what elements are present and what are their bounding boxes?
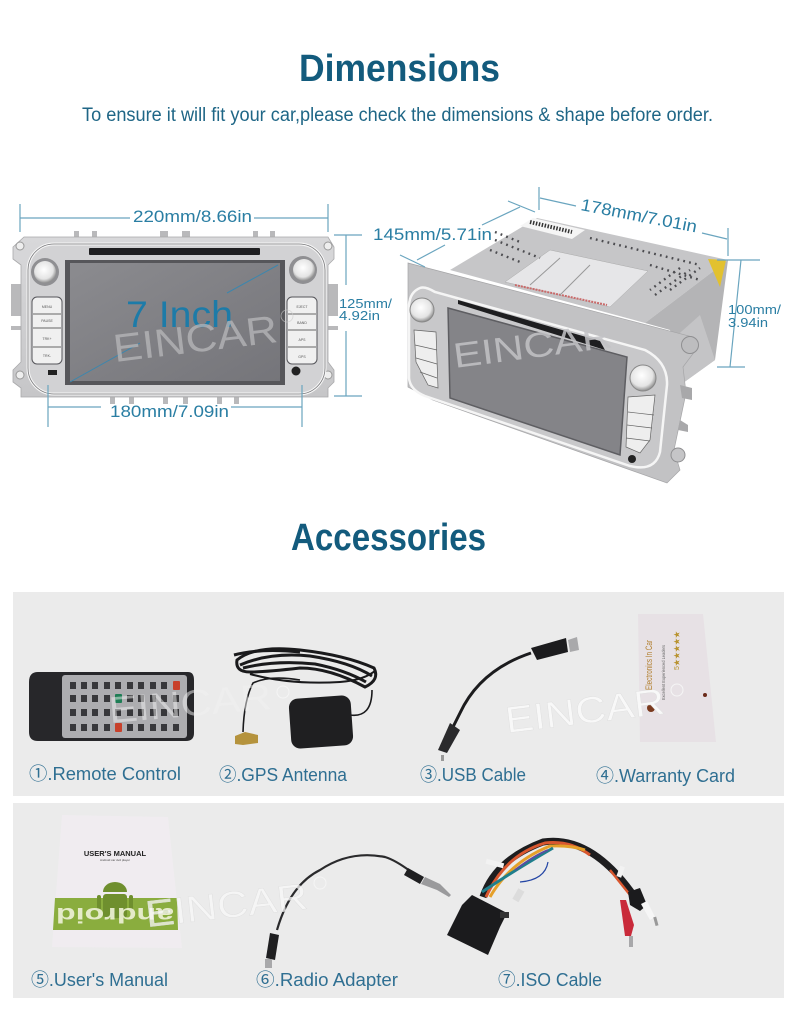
info label (505, 250, 648, 307)
watermark: EINCAR (111, 308, 280, 371)
remote control (29, 672, 194, 741)
mounting tabs (11, 231, 338, 404)
dimension: length 178mm: 178mm/7.01in (579, 195, 699, 236)
warranty card (638, 614, 716, 742)
screen diagonal lines (70, 265, 278, 382)
GPS antenna (234, 649, 376, 749)
left buttons: TRK- (43, 354, 52, 358)
front view of head unit (11, 231, 338, 404)
label: Remote Control: ①.Remote Control (29, 764, 181, 784)
knobs (31, 258, 59, 286)
chassis side (645, 260, 728, 383)
left buttons: MENU (42, 305, 53, 309)
chrome bezel (28, 244, 325, 394)
dimension: height 100mm (717, 260, 781, 367)
barcode sticker (520, 218, 585, 239)
label: 7 Inch: 7 Inch (126, 294, 233, 335)
dimension: screen width 180mm (48, 385, 302, 427)
label: ISO Cable: ⑦.ISO Cable (498, 970, 602, 990)
angled view of head unit (408, 218, 728, 483)
ISO cable (447, 841, 658, 955)
label: User's Manual: ⑤.User's Manual (31, 970, 168, 990)
user's manual: USER'S MANUAL (84, 849, 147, 858)
android robot (97, 882, 133, 918)
chrome bezel (409, 288, 667, 467)
right buttons: GPS (298, 355, 306, 359)
dimension: height 125mm: 125mm/ (339, 296, 392, 311)
screen (65, 260, 285, 385)
title: Accessories: Accessories (291, 517, 486, 559)
dimension: height 125mm: 4.92in (339, 308, 380, 323)
label: USB Cable: ③.USB Cable (420, 765, 526, 785)
user's manual (52, 815, 182, 948)
side buttons (414, 330, 438, 388)
radio adapter (265, 855, 451, 968)
dimension: width 220mm: 220mm/8.66in (133, 207, 252, 226)
dimension: height 100mm: 100mm/ (728, 302, 781, 317)
watermark: EINCAR (107, 676, 273, 731)
panel: accessories row 2 (13, 803, 784, 998)
watermark: EINCAR (451, 316, 615, 376)
subtitle: To ensure it will fit your car,please check the dimensions & shape before order. (82, 105, 713, 126)
dimension: height 100mm: 3.94in (728, 315, 768, 330)
right buttons: BAND (297, 321, 307, 325)
title: Dimensions: Dimensions (299, 48, 500, 90)
user's manual: Android car dvd player (100, 858, 130, 862)
warranty card: Excellent Experienced Leaders (661, 644, 666, 700)
warranty card: Electronics In Car (644, 640, 654, 690)
label: Warranty Card: ④.Warranty Card (596, 766, 735, 786)
watermark: EINCAR (143, 876, 310, 935)
vent holes (490, 232, 700, 295)
disc slot (89, 248, 260, 255)
panel: accessories row 1 (13, 592, 784, 796)
left buttons (32, 297, 62, 364)
right buttons: APS (298, 338, 306, 342)
right buttons: EJECT (296, 305, 308, 309)
dimension: depth 145mm (373, 201, 535, 267)
screen (448, 308, 627, 455)
label: Radio Adapter: ⑥.Radio Adapter (256, 970, 398, 990)
right buttons (287, 297, 317, 364)
dimension: height 125mm (334, 235, 392, 396)
dimension: width 220mm (20, 204, 328, 232)
silver frame (13, 237, 334, 397)
left buttons: TRK+ (42, 337, 52, 341)
knobs (410, 298, 434, 322)
front frame (408, 263, 698, 483)
dimension: screen width 180mm: 180mm/7.09in (110, 402, 229, 421)
disc slot (458, 300, 605, 350)
label: GPS Antenna: ②.GPS Antenna (219, 765, 348, 785)
bracket ears (682, 336, 698, 354)
left buttons: PAUSE (41, 319, 53, 323)
warranty card: 5★★★★★ (673, 631, 681, 670)
dimension: depth 145mm: 145mm/5.71in (373, 225, 492, 244)
USB cable (438, 637, 579, 761)
dimension: length 178mm (539, 187, 728, 256)
user's manual: android (56, 903, 174, 926)
watermark: EINCAR (503, 681, 667, 741)
chassis top (450, 218, 728, 323)
